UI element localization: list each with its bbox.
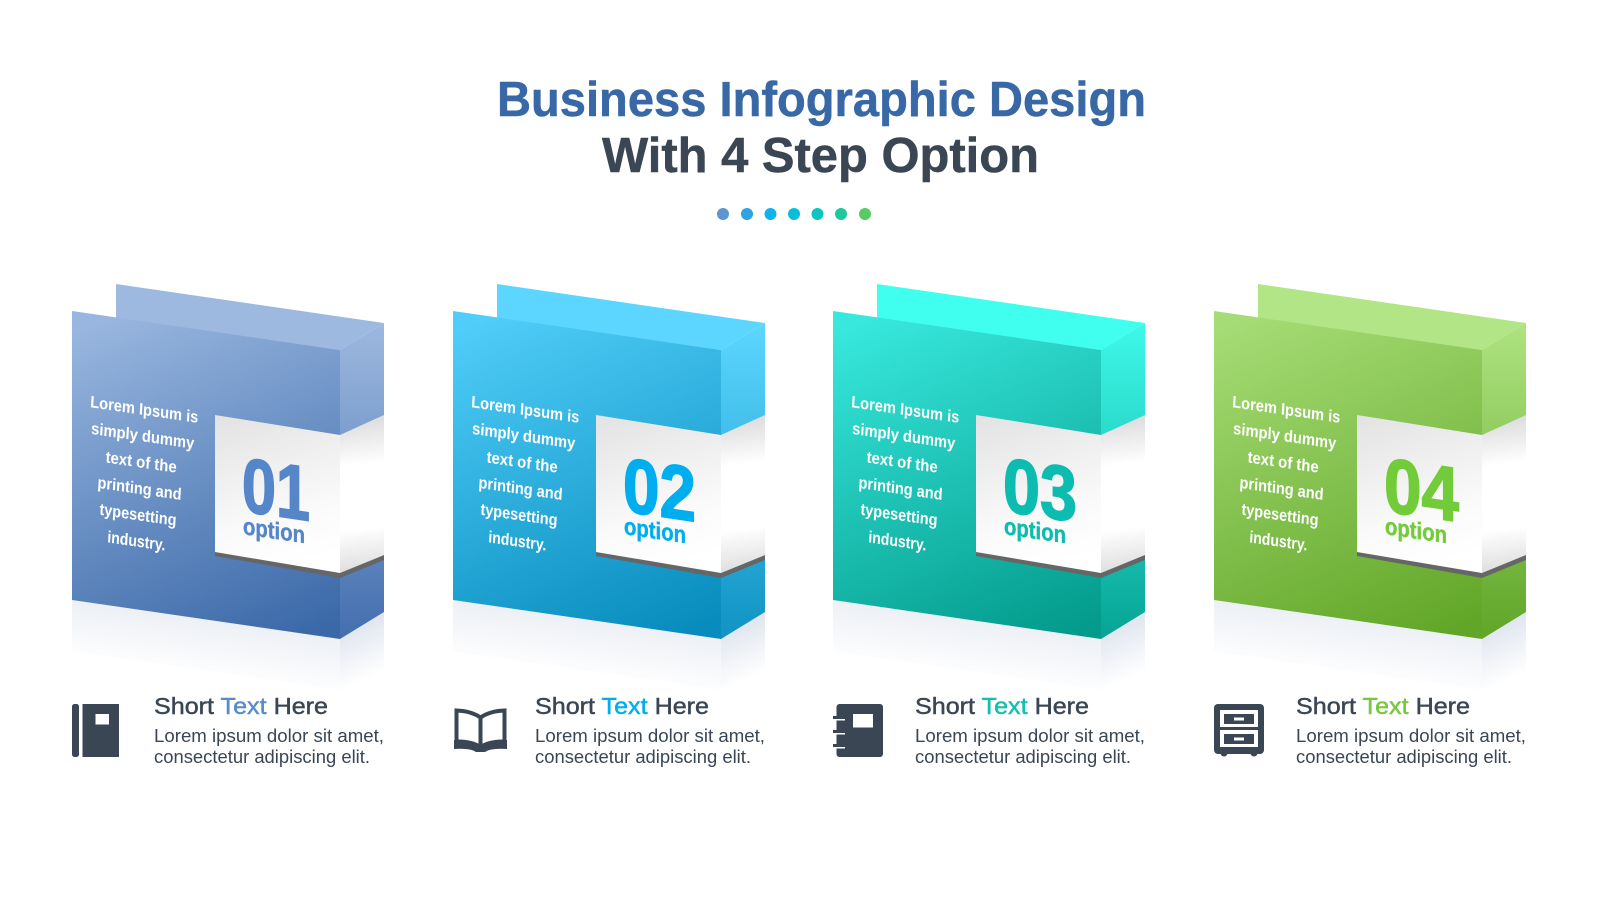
step number: 04 xyxy=(1384,442,1459,539)
step number: 02 xyxy=(623,442,696,538)
box text: text of the xyxy=(105,448,177,477)
dot divider xyxy=(717,208,871,220)
title: Business Infographic Design xyxy=(497,73,1146,127)
box text: industry. xyxy=(1249,527,1308,555)
box text: text of the xyxy=(1247,448,1319,477)
box text: printing and xyxy=(478,473,563,504)
text: step 04 caption xyxy=(1296,693,1526,767)
box text: printing and xyxy=(858,473,943,504)
box text: typesetting xyxy=(480,500,558,530)
panel: step 04 box xyxy=(1214,284,1526,690)
box text xyxy=(1224,392,1341,558)
icon: open book xyxy=(454,710,507,752)
text: step 03 caption: Lorem ipsum dolor sit amet, xyxy=(915,725,1145,746)
box text: industry. xyxy=(107,527,166,555)
text: step 04 caption: Lorem ipsum dolor sit amet, xyxy=(1296,725,1526,746)
icon: spiral notebook xyxy=(833,704,883,757)
step number: option xyxy=(624,513,686,549)
title: With 4 Step Option xyxy=(602,129,1039,183)
text: step 01 caption: consectetur adipiscing elit. xyxy=(154,746,370,767)
box text: Lorem Ipsum is xyxy=(471,392,580,427)
panel: step 01 box xyxy=(72,284,384,690)
box text: text of the xyxy=(486,448,558,477)
icon: closed book xyxy=(72,704,119,757)
box text: Lorem Ipsum is xyxy=(90,392,199,427)
step number: 01 xyxy=(242,442,310,538)
text: step 02 caption: Lorem ipsum dolor sit amet, xyxy=(535,725,765,746)
step number: option xyxy=(1004,513,1066,549)
box text: simply dummy xyxy=(91,419,195,453)
box text: text of the xyxy=(866,448,938,477)
box text: printing and xyxy=(1239,473,1324,504)
text: step 02 caption: Short Text Here xyxy=(535,693,709,719)
text: step 01 caption: Lorem ipsum dolor sit amet, xyxy=(154,725,384,746)
text: step 02 caption xyxy=(535,693,765,767)
text: step 02 caption: consectetur adipiscing elit. xyxy=(535,746,751,767)
text: step 03 caption xyxy=(915,693,1145,767)
box text: simply dummy xyxy=(1233,419,1337,453)
box text: Lorem Ipsum is xyxy=(851,392,960,427)
panel: step 02 box xyxy=(453,284,765,690)
text: step 04 caption: consectetur adipiscing elit. xyxy=(1296,746,1512,767)
box text xyxy=(82,392,199,558)
icon: filing cabinet xyxy=(1214,704,1264,756)
title xyxy=(497,73,1146,183)
box text: simply dummy xyxy=(472,419,576,453)
step number: option xyxy=(1385,513,1447,549)
step number: option xyxy=(243,513,305,549)
text: step 04 caption: Short Text Here xyxy=(1296,693,1470,719)
text: step 01 caption xyxy=(154,693,384,767)
step number: 03 xyxy=(1003,442,1077,539)
box text: printing and xyxy=(97,473,182,504)
box text: Lorem Ipsum is xyxy=(1232,392,1341,427)
box text: typesetting xyxy=(1241,500,1319,530)
box text: simply dummy xyxy=(852,419,956,453)
box text: industry. xyxy=(868,527,927,555)
text: step 01 caption: Short Text Here xyxy=(154,693,328,719)
box text xyxy=(843,392,960,558)
box text: industry. xyxy=(488,527,547,555)
box text: typesetting xyxy=(860,500,938,530)
panel: step 03 box xyxy=(833,284,1145,690)
box text xyxy=(463,392,580,558)
box text: typesetting xyxy=(99,500,177,530)
text: step 03 caption: consectetur adipiscing elit. xyxy=(915,746,1131,767)
text: step 03 caption: Short Text Here xyxy=(915,693,1089,719)
